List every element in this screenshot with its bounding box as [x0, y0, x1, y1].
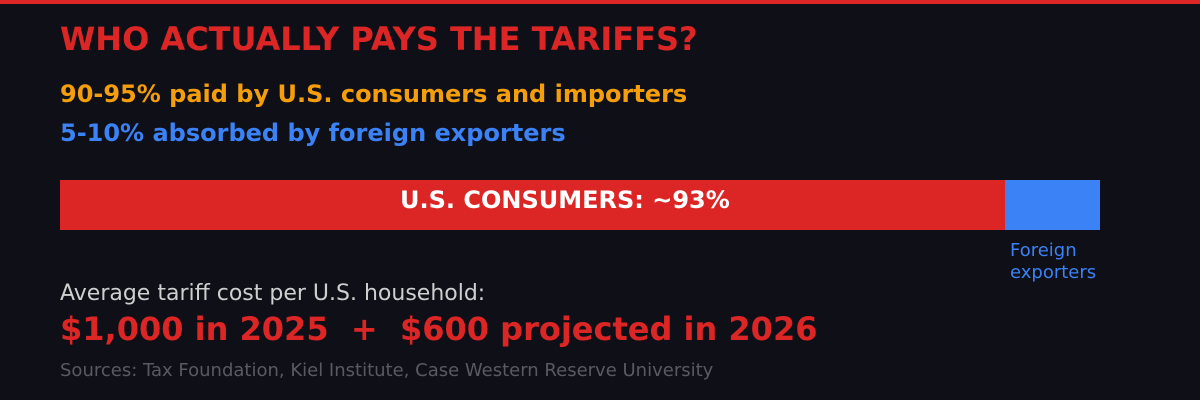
stacked bar chart	[60, 180, 1100, 230]
title: WHO ACTUALLY PAYS THE TARIFFS?	[60, 20, 698, 58]
household cost label: Average tariff cost per U.S. household:	[60, 281, 485, 306]
bar label: foreign exporters: exporters	[1010, 262, 1096, 283]
bar segment: foreign exporters	[1005, 180, 1100, 230]
sources: Sources: Tax Foundation, Kiel Institute, Case Western Reserve University	[60, 360, 713, 381]
subtitle: exporters share: 5-10% absorbed by foreign exporters	[60, 119, 566, 147]
top accent bar	[0, 0, 1200, 4]
subtitle: consumers share: 90-95% paid by U.S. consumers and importers	[60, 80, 687, 108]
bar label: foreign exporters: Foreign	[1010, 240, 1077, 261]
household cost figures: $1,000 in 2025 + $600 projected in 2026	[60, 310, 817, 348]
bar label: foreign exporters	[1010, 240, 1096, 283]
bar segment: U.S. consumers	[60, 180, 1005, 230]
bar segment: U.S. consumers: U.S. CONSUMERS: ~93%	[400, 186, 730, 214]
